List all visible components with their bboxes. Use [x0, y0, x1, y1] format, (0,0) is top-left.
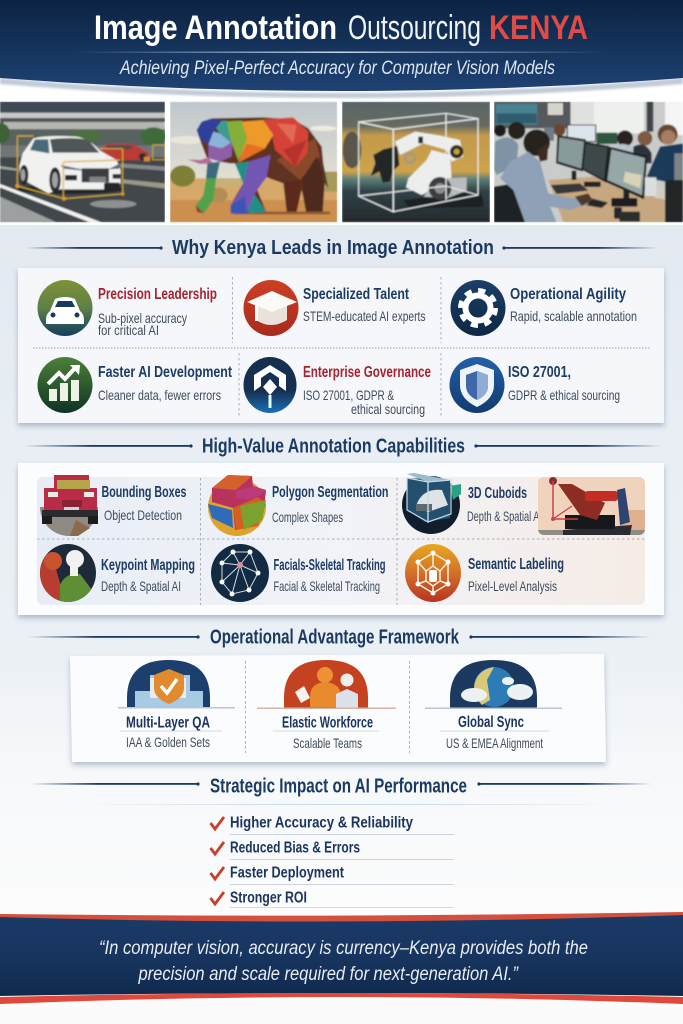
- card: polygon segmentation: Polygon Segmentation: [272, 484, 388, 501]
- card: global sync: US & EMEA Alignment: [446, 735, 543, 751]
- icon: graduation cap: [244, 280, 298, 336]
- elephant silhouette: [197, 117, 325, 213]
- photo: annotation team at workstations: [494, 102, 683, 222]
- card: multi-layer QA: IAA & Golden Sets: [126, 734, 210, 750]
- quote text: “In computer vision, accuracy is currency–Kenya provides both the: [99, 937, 588, 959]
- card: elastic workforce: Elastic Workforce: [282, 714, 373, 732]
- section heading: framework: [28, 626, 651, 648]
- check item: accuracy: Higher Accuracy & Reliability: [230, 814, 413, 832]
- quote banner: [0, 912, 683, 1004]
- orange ear: [238, 120, 273, 163]
- panel: why Kenya leads: [18, 268, 664, 423]
- title: KENYA: [489, 9, 588, 47]
- robot: [395, 132, 463, 162]
- card: polygon segmentation: Complex Shapes: [272, 509, 343, 525]
- green and teal head: [223, 121, 247, 161]
- section heading: strategic impact: [30, 776, 652, 805]
- card: 3D cuboids: Depth & Spatial AI: [467, 508, 542, 524]
- red car: [102, 144, 149, 160]
- yellow box: [17, 136, 123, 199]
- card: keypoint mapping: [38, 544, 195, 605]
- quote text: [99, 937, 588, 985]
- photo: robot in cuboid: [538, 477, 645, 535]
- item: faster AI development: Cleaner data, fewer errors: [98, 387, 221, 403]
- item: precision leadership: Precision Leadership: [98, 286, 217, 303]
- card: keypoint mapping: Keypoint Mapping: [101, 557, 195, 574]
- card: semantic labeling: Semantic Labeling: [468, 556, 564, 573]
- item: enterprise governance: ethical sourcing: [351, 401, 425, 417]
- photo: car with bounding box: [0, 102, 166, 222]
- check item: deployment: [210, 864, 454, 885]
- card: 3D cuboids: [402, 473, 645, 535]
- card: keypoint mapping: Depth & Spatial AI: [101, 578, 181, 594]
- check item: bias: Reduced Bias & Errors: [230, 840, 360, 856]
- item: operational agility: [450, 280, 637, 336]
- check item: bias: [210, 840, 454, 860]
- card: multi-layer QA: [118, 660, 235, 750]
- check item: ROI: [210, 890, 454, 908]
- icon: governance emblem: [244, 357, 296, 413]
- subtitle: Achieving Pixel-Perfect Accuracy for Computer Vision Models: [119, 57, 555, 79]
- icon: shield: [450, 357, 504, 413]
- impact checklist: [210, 814, 454, 908]
- card: semantic labeling: Pixel-Level Analysis: [468, 578, 557, 594]
- card: polygon segmentation: [208, 475, 388, 536]
- item: specialized talent: STEM-educated AI experts: [303, 308, 426, 324]
- card: 3D cuboids: 3D Cuboids: [468, 485, 527, 502]
- panel: operational framework: [70, 654, 606, 762]
- back workers: [617, 130, 633, 146]
- trunk: [187, 157, 213, 164]
- title: [94, 9, 588, 47]
- section heading: capabilities: High-Value Annotation Capabilities: [202, 436, 465, 458]
- item: specialized talent: [244, 280, 426, 336]
- title: Outsourcing: [348, 9, 481, 47]
- card: bounding boxes: [40, 475, 187, 536]
- icon: cuboid: [402, 473, 461, 534]
- photo strip: [0, 102, 683, 222]
- monitors: [556, 135, 586, 172]
- card: bounding boxes: Object Detection: [104, 507, 182, 523]
- item: operational agility: Rapid, scalable annotation: [510, 308, 637, 324]
- item: ISO 27001: GDPR & ethical sourcing: [508, 387, 620, 403]
- item: enterprise governance: Enterprise Governance: [303, 364, 431, 381]
- card: facial and skeletal tracking: Facial & Skeletal Tracking: [274, 578, 380, 594]
- red ear: [263, 117, 308, 167]
- item: precision leadership: [38, 280, 217, 338]
- front legs: [235, 162, 266, 213]
- section heading: why Kenya: Why Kenya Leads in Image Annotation: [172, 237, 494, 259]
- section heading: strategic impact: Strategic Impact on AI Performance: [210, 776, 467, 798]
- card: bounding boxes: Bounding Boxes: [102, 484, 187, 501]
- section heading: why Kenya: [26, 237, 658, 259]
- section heading: capabilities: [24, 436, 662, 458]
- icon: QA dome: [118, 660, 235, 708]
- icon: coloured polygons: [208, 475, 266, 536]
- blue ear: [197, 118, 222, 145]
- item: enterprise governance: ISO 27001, GDPR &: [303, 387, 394, 403]
- foreground worker: [494, 183, 527, 222]
- card: global sync: Global Sync: [458, 714, 524, 731]
- gripper: [371, 146, 399, 183]
- card: global sync: [425, 660, 562, 751]
- keyboard: [585, 197, 608, 208]
- check item: ROI: Stronger ROI: [230, 890, 307, 906]
- item: precision leadership: Sub-pixel accuracy: [98, 310, 187, 326]
- icon: workforce dome: [257, 660, 396, 709]
- icon: car: [38, 280, 92, 336]
- card: semantic labeling: [405, 544, 564, 602]
- photo: robot arm in 3D cuboid: [342, 102, 490, 222]
- item: enterprise governance: [244, 357, 431, 417]
- card: elastic workforce: Scalable Teams: [293, 735, 362, 751]
- item: ISO 27001: ISO 27001,: [508, 364, 571, 381]
- card: facial and skeletal tracking: [211, 544, 386, 602]
- item: operational agility: Operational Agility: [510, 286, 626, 303]
- panel: annotation capabilities: [18, 463, 664, 615]
- photo: low-poly elephant: [170, 102, 337, 222]
- title: Image Annotation: [94, 9, 337, 47]
- item: ISO 27001: [450, 357, 620, 413]
- icon: growth chart: [38, 357, 92, 413]
- wire cube: [359, 113, 478, 212]
- icon: globe dome: [425, 660, 562, 709]
- item: faster AI development: Faster AI Development: [98, 364, 233, 381]
- white car: [17, 185, 123, 194]
- icon: gear: [450, 280, 506, 336]
- icon: red truck: [40, 475, 98, 536]
- check item: deployment: Faster Deployment: [230, 864, 345, 882]
- card: elastic workforce: [257, 660, 396, 751]
- section heading: framework: Operational Advantage Framework: [210, 626, 460, 648]
- card: multi-layer QA: Multi-Layer QA: [126, 714, 210, 732]
- icon: two people: [38, 544, 96, 605]
- quote text: precision and scale required for next-generation AI.”: [138, 963, 519, 985]
- item: precision leadership: for critical AI: [98, 322, 159, 338]
- header banner: [0, 0, 683, 98]
- item: specialized talent: Specialized Talent: [303, 286, 410, 303]
- icon: semantic mesh: [405, 544, 461, 602]
- icon: keypoint network: [211, 544, 269, 602]
- desk: [548, 177, 665, 222]
- item: faster AI development: [38, 357, 233, 413]
- card: facial and skeletal tracking: Facials-Skeletal Tracking: [274, 557, 386, 574]
